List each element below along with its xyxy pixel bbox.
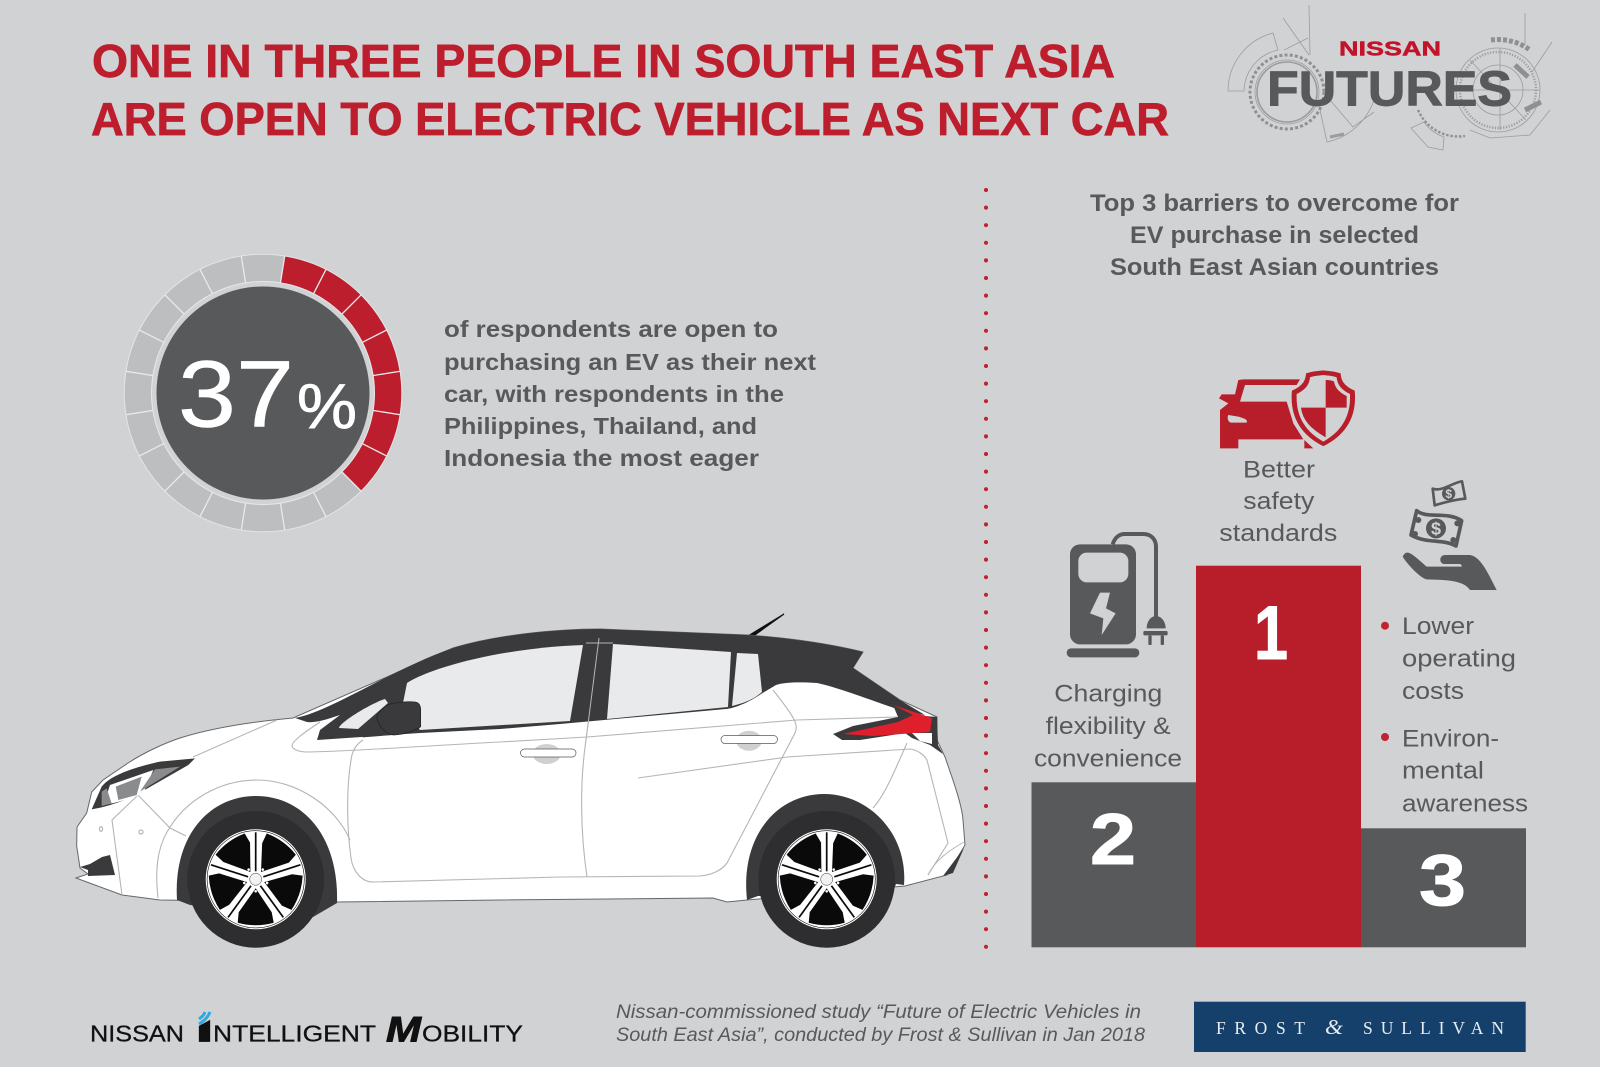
logo: Nissan Intelligent Mobility: NTELLIGENT <box>213 1021 376 1047</box>
title <box>91 35 1169 145</box>
logo: Nissan Intelligent Mobility: OBILITY <box>422 1021 523 1047</box>
title: ARE OPEN TO ELECTRIC VEHICLE AS NEXT CAR <box>91 93 1169 145</box>
front wheel <box>187 811 324 948</box>
bullet list: rank 3 reasons: costs <box>1402 678 1464 705</box>
podium bar: rank 2 <box>1032 782 1196 947</box>
podium bar: rank 1: 1 <box>1254 591 1288 676</box>
car illustration <box>76 614 965 948</box>
podium bar: rank 1 <box>1196 566 1361 947</box>
podium bar: rank 2: 2 <box>1090 800 1136 880</box>
heading: top 3 barriers <box>1090 190 1459 281</box>
label: better safety standards: standards <box>1219 520 1337 547</box>
grille <box>80 855 115 876</box>
text: respondents description: of respondents are open to <box>444 316 778 342</box>
bullet list: rank 3 reasons: operating <box>1402 646 1516 672</box>
label: charging flexibility: convenience <box>1034 746 1182 772</box>
bullet list: rank 3 reasons: Environ- <box>1402 726 1499 752</box>
text: respondents description: car, with respondents in the <box>444 381 784 407</box>
donut chart: 37% <box>120 250 406 536</box>
heading: top 3 barriers: Top 3 barriers to overcome for <box>1090 190 1459 217</box>
label: better safety standards <box>1219 456 1337 547</box>
donut chart: 37%: % <box>297 372 357 442</box>
bullet list: rank 3 reasons <box>1381 613 1528 818</box>
logo: Nissan Intelligent Mobility <box>90 1011 523 1050</box>
label: charging flexibility: Charging <box>1054 680 1162 708</box>
windows <box>339 644 762 730</box>
label: charging flexibility: flexibility & <box>1046 713 1171 740</box>
text: respondents description: purchasing an EV as their next <box>444 349 816 375</box>
headlight <box>92 758 195 809</box>
heading: top 3 barriers: EV purchase in selected <box>1130 222 1419 249</box>
dotted divider <box>984 190 988 948</box>
tail light <box>833 705 943 754</box>
bullet list: rank 3 reasons: mental <box>1402 758 1484 784</box>
podium bar: rank 3 <box>1361 828 1526 947</box>
icon: charging station <box>1067 534 1168 657</box>
wing mirror <box>363 702 421 737</box>
label: better safety standards: safety <box>1243 488 1314 515</box>
source note: South East Asia”, conducted by Frost & Sullivan in Jan 2018 <box>616 1025 1145 1046</box>
car body <box>76 629 965 902</box>
rear wheel <box>758 811 895 948</box>
podium bar: rank 3: 3 <box>1419 841 1466 921</box>
source note: Nissan-commissioned study “Future of Electric Vehicles in <box>616 1002 1141 1023</box>
logo: Frost & Sullivan <box>1194 1002 1526 1052</box>
logo: Frost & Sullivan: FROST <box>1216 1018 1305 1038</box>
logo: Nissan Intelligent Mobility: NISSAN <box>90 1021 184 1047</box>
donut chart: 37%: 37 <box>178 342 294 448</box>
antenna <box>748 614 784 637</box>
title: ONE IN THREE PEOPLE IN SOUTH EAST ASIA <box>92 35 1115 87</box>
B-pillar line <box>586 638 613 740</box>
fog lamps <box>100 827 143 834</box>
logo: Nissan Futures: FUTURES <box>1267 63 1512 117</box>
rear lower bumper <box>943 848 964 876</box>
wheel arches <box>177 796 337 917</box>
logo: Nissan Intelligent Mobility: I <box>200 1021 208 1047</box>
logo: Nissan Intelligent Mobility: M <box>386 1011 422 1050</box>
logo: Frost & Sullivan: & <box>1325 1015 1344 1039</box>
bullet list: rank 3 reasons: Lower <box>1402 613 1474 640</box>
icon: money in hand: $ <box>1431 519 1441 539</box>
logo: Frost & Sullivan: SULLIVAN <box>1363 1018 1504 1038</box>
logo: Nissan Futures <box>1228 5 1552 150</box>
body panel lines <box>112 638 948 898</box>
label: charging flexibility <box>1034 680 1182 772</box>
icon: money in hand: $ <box>1445 487 1452 501</box>
icon: money in hand <box>1403 481 1497 590</box>
logo: Nissan Futures: NISSAN <box>1339 37 1441 60</box>
bullet list: rank 3 reasons: awareness <box>1402 790 1528 818</box>
icon: car with safety shield <box>1219 369 1356 448</box>
label: better safety standards: Better <box>1243 456 1315 484</box>
text: respondents description <box>444 316 816 471</box>
text: respondents description: Philippines, Thailand, and <box>444 413 757 439</box>
door handles <box>520 731 778 764</box>
source note <box>616 1002 1145 1046</box>
text: respondents description: Indonesia the most eager <box>444 445 759 471</box>
heading: top 3 barriers: South East Asian countries <box>1110 254 1439 281</box>
roof and window frames <box>295 629 925 740</box>
